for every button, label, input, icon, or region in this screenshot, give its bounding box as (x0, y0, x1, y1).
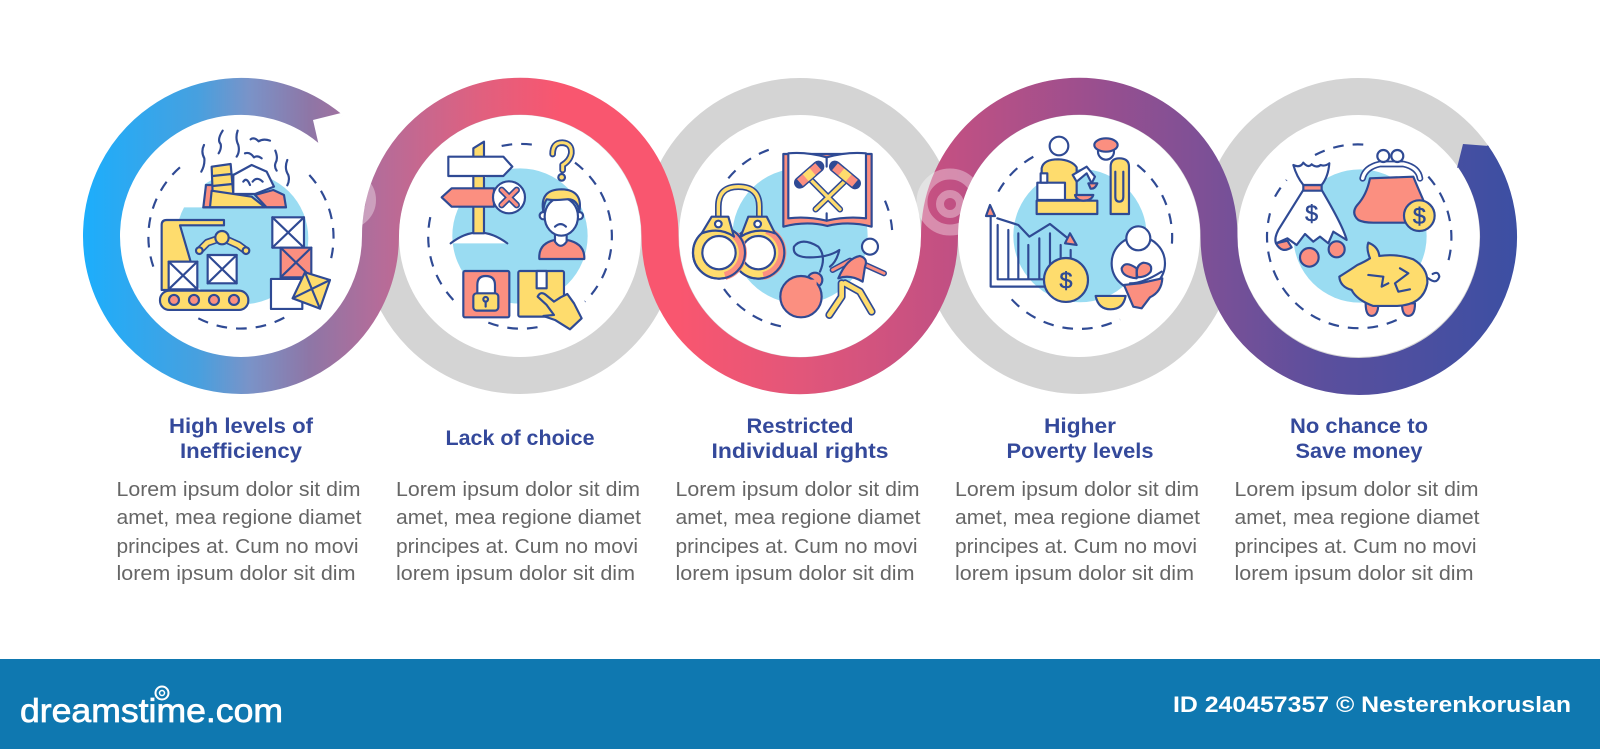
heading 3 (712, 415, 888, 463)
body text 5: amet, mea regione diamet (1234, 506, 1480, 529)
body text 2: Lorem ipsum dolor sit dim (396, 478, 640, 501)
body text 4: principes at. Cum no movi (955, 535, 1197, 558)
heading 3: Individual rights (712, 440, 888, 463)
icon 1: inefficiency, factory and waste (148, 131, 334, 329)
body text 5: principes at. Cum no movi (1234, 535, 1477, 558)
footer band (0, 659, 1600, 749)
icon 5: no savings, torn money bag, purse, broken piggy bank: $ (1413, 203, 1426, 229)
heading 4 (1006, 415, 1154, 463)
body text 3: amet, mea regione diamet (676, 506, 921, 529)
body text 4: Lorem ipsum dolor sit dim (955, 478, 1199, 501)
body text 1: lorem ipsum dolor sit dim (116, 562, 356, 585)
body text 3 (676, 478, 921, 585)
heading 4: Higher (1044, 415, 1116, 438)
body text 3: principes at. Cum no movi (676, 535, 918, 558)
heading 1 (169, 415, 314, 463)
body text 1 (116, 478, 362, 585)
watermark spirals on ribbon (323, 174, 978, 230)
body text 2 (396, 478, 641, 585)
body text 1: Lorem ipsum dolor sit dim (116, 478, 360, 501)
body text 5: Lorem ipsum dolor sit dim (1234, 478, 1478, 501)
heading 1: High levels of (169, 415, 314, 438)
icon 4: poverty, food line, falling chart, coin, beggar: $ (1059, 267, 1072, 293)
body text 1: principes at. Cum no movi (116, 535, 359, 558)
body text 5 (1234, 478, 1480, 585)
icon 4: poverty, food line, falling chart, coin, beggar (986, 137, 1172, 329)
footer credit: ID 240457357 © Nesterenkoruslan (1173, 692, 1571, 717)
grey background rings (380, 96, 1498, 376)
icon 5: no savings, torn money bag, purse, broken piggy bank (1267, 144, 1451, 328)
icon 3: restricted rights, handcuffs, law book, ball and chain runner (693, 148, 892, 327)
heading 2: Lack of choice (446, 427, 594, 450)
body text 4: amet, mea regione diamet (955, 506, 1200, 529)
body text 5: lorem ipsum dolor sit dim (1234, 562, 1474, 585)
body text 2: lorem ipsum dolor sit dim (396, 562, 635, 585)
heading 1: Inefficiency (180, 440, 302, 463)
heading 4: Poverty levels (1006, 440, 1154, 463)
heading 5: Save money (1296, 440, 1423, 463)
gradient ribbon connecting all five circles (102, 96, 1498, 377)
body text 2: principes at. Cum no movi (396, 535, 638, 558)
body text 2: amet, mea regione diamet (396, 506, 641, 529)
body text 4 (955, 478, 1200, 585)
icon 2: lack of choice, signpost, person, lock, box (428, 142, 612, 329)
footer logo: dreamstime.com (20, 692, 283, 729)
body text 3: Lorem ipsum dolor sit dim (676, 478, 920, 501)
heading 5: No chance to (1290, 415, 1428, 438)
body text 3: lorem ipsum dolor sit dim (676, 562, 914, 585)
icon 5: no savings, torn money bag, purse, broken piggy bank: $ (1305, 201, 1318, 227)
body text 4: lorem ipsum dolor sit dim (955, 562, 1194, 585)
heading 3: Restricted (746, 415, 854, 438)
heading 5 (1290, 415, 1428, 463)
body text 1: amet, mea regione diamet (116, 506, 362, 529)
